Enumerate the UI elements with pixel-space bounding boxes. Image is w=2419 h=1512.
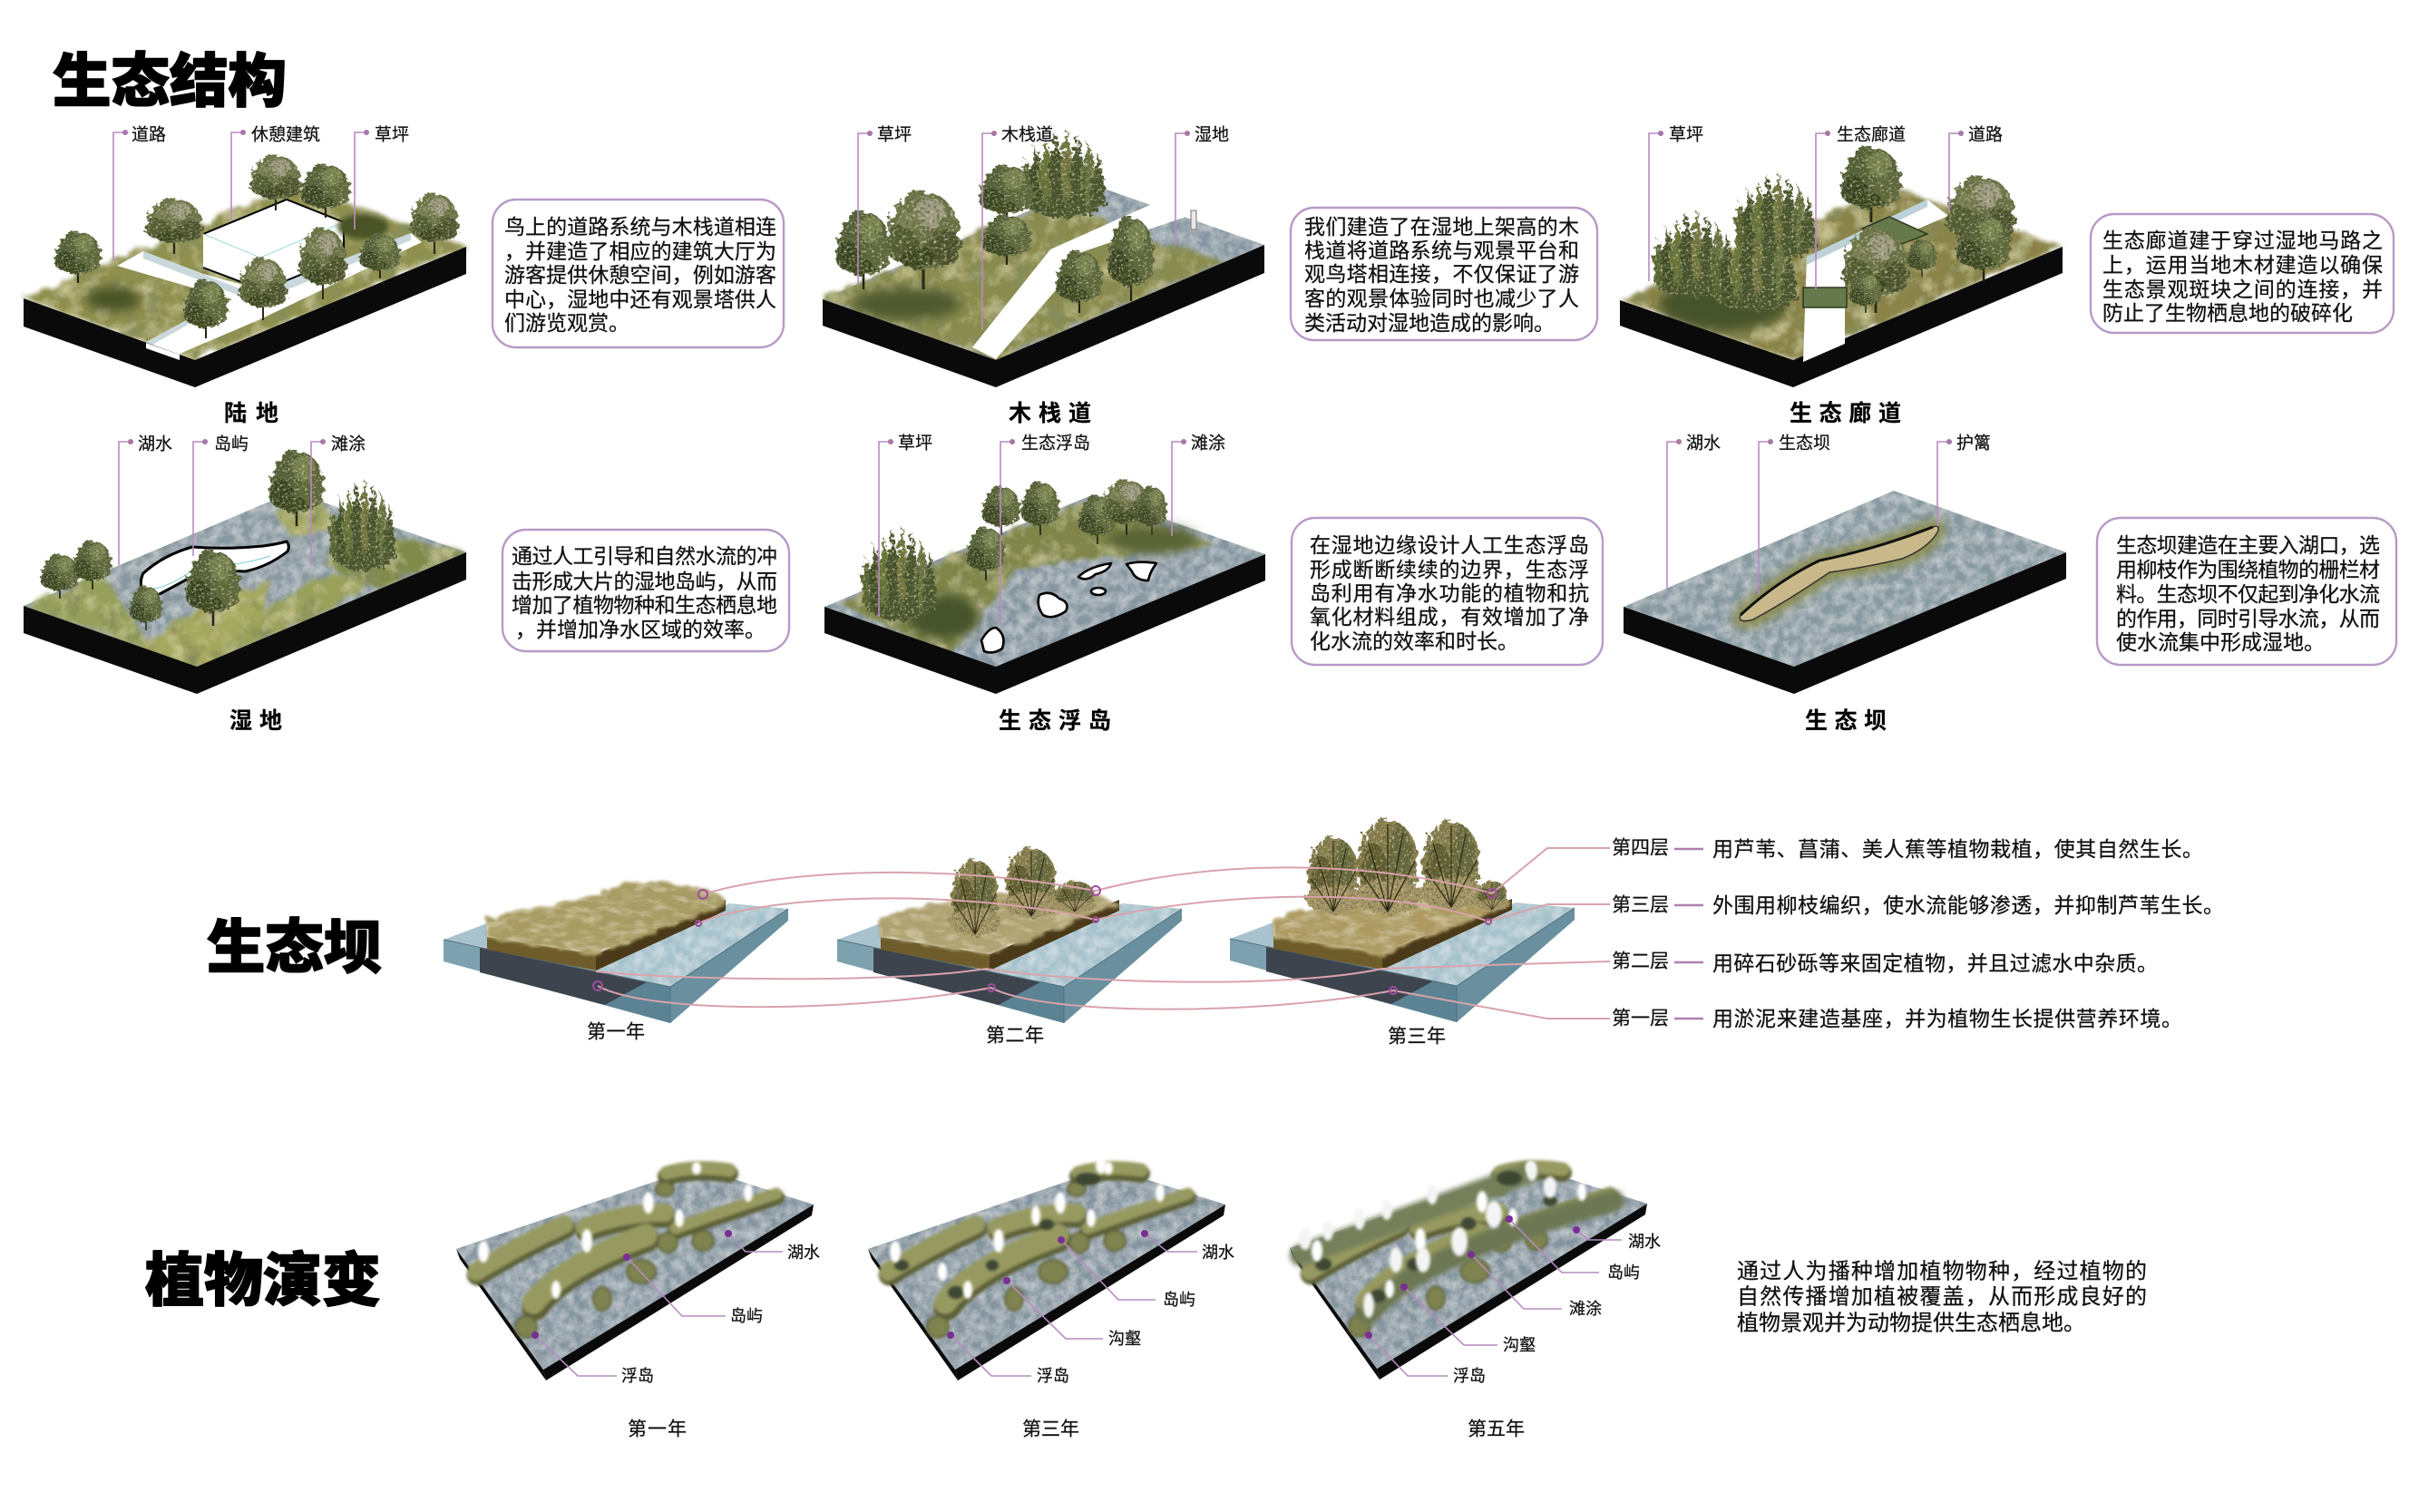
callout: 湿地 [502,530,789,651]
callout: 陆地: 中心，湿地中还有观景塔供人 [504,288,776,311]
labels: 木栈道: 木栈道 [1001,125,1053,145]
labels: 陆地: 道路 [132,125,166,145]
callout: 生态坝: 料。生态坝不仅起到净化水流 [2116,582,2380,606]
labels: plate 第五年 [1365,1215,1661,1385]
labels: 木栈道 [858,125,1229,329]
year label: 第三年: 第三年 [1388,1027,1446,1047]
labels: plate 第一年: 岛屿 [730,1307,763,1325]
heading: 植物演变: 植物演变 [145,1248,381,1313]
dam model: 第二年 [837,848,1182,1023]
labels: plate 第五年: 湖水 [1628,1233,1661,1251]
heading: 生态坝: 生态坝 [207,915,382,980]
callout: 湿地: ，并增加净水区域的效率。 [515,618,766,641]
caption: 生态廊道: 生态廊道 [1790,401,1901,426]
block: 生态浮岛 [824,480,1265,694]
callout: 陆地: 们游览观赏。 [504,311,629,335]
labels: plate 第三年 [947,1230,1234,1385]
layer legend: 用碎石砂砾等来固定植物，并且过滤水中杂质。 [1712,951,2158,975]
plate: 第三年 [868,1157,1225,1380]
labels: 生态廊道: 生态廊道 [1837,125,1906,145]
labels: plate 第一年: 湖水 [787,1244,820,1262]
labels: 湿地: 岛屿 [214,434,249,454]
callout: 木栈道: 栈道将道路系统与观景平台和 [1304,239,1579,262]
caption: 生态坝: 生态坝 [1805,708,1887,734]
callout: 木栈道: 观鸟塔相连接，不仅保证了游 [1304,262,1579,286]
callout: 生态坝: 使水流集中形成湿地。 [2116,630,2325,654]
layer legend: 第一层 [1612,1009,1669,1029]
labels: plate 第一年 [532,1230,820,1385]
labels: plate 第三年: 沟壑 [1108,1330,1141,1348]
callout: 陆地: 鸟上的道路系统与木栈道相连 [504,215,776,239]
labels: plate 第五年: 沟壑 [1503,1336,1536,1354]
labels: plate 第五年: 岛屿 [1607,1263,1640,1282]
connector curves [593,848,1610,1019]
year label: plate 第三年: 第三年 [1022,1419,1079,1440]
labels: 生态坝 [1667,434,1991,595]
labels: plate 第三年: 湖水 [1202,1244,1234,1262]
callout: 木栈道: 客的观景体验同时也减少了人 [1304,287,1579,310]
callout: 生态浮岛: 岛利用有净水功能的植物和抗 [1310,581,1589,605]
dam model: 第三年 [1230,820,1575,1022]
callout: 生态坝 [2097,518,2396,665]
callout: 生态坝: 用柳枝作为围绕植物的栅栏材 [2116,558,2380,581]
block: 生态坝 [1624,491,2066,694]
plate: 第五年 [1290,1161,1647,1380]
caption: 木栈道: 木栈道 [1009,401,1091,426]
callout: 生态坝: 生态坝建造在主要入湖口，选 [2116,533,2380,557]
layer legend: 外围用柳枝编织，使水流能够渗透，并抑制芦苇生长。 [1712,893,2224,917]
labels: 生态浮岛 [879,434,1225,625]
text block: 植物演变说明 [1737,1259,2147,1335]
plate: 第一年 [456,1162,814,1380]
labels: 湿地: 滩涂 [331,434,366,454]
labels: 生态浮岛: 草坪 [898,434,932,454]
labels: 陆地: 休憩建筑 [251,125,320,145]
text block: 植物演变说明: 通过人为播种增加植物物种，经过植物的 [1737,1259,2147,1284]
callout: 生态廊道 [2091,214,2394,333]
labels: 生态廊道 [1649,125,2003,289]
callout: 木栈道: 我们建造了在湿地上架高的木 [1304,215,1579,239]
callout: 生态浮岛: 化水流的效率和时长。 [1310,629,1518,653]
caption: 生态浮岛: 生态浮岛 [999,708,1111,734]
year label: plate 第五年: 第五年 [1468,1419,1525,1440]
labels: 陆地: 草坪 [375,125,409,145]
labels: 生态廊道: 草坪 [1669,125,1703,145]
title: 生态结构: 生态结构 [53,49,287,114]
callout: 湿地: 击形成大片的湿地岛屿，从而 [512,570,777,593]
callout: 湿地: 通过人工引导和自然水流的冲 [512,544,777,568]
year label: 第一年: 第一年 [587,1021,645,1043]
callout: 生态浮岛: 氧化材料组成，有效增加了净 [1310,605,1589,629]
callout: 生态廊道: 生态景观斑块之间的连接，并 [2102,278,2383,301]
callout: 木栈道 [1291,208,1597,340]
callout: 生态浮岛 [1292,518,1603,665]
labels: plate 第五年: 浮岛 [1453,1367,1486,1385]
labels: 生态坝: 生态坝 [1779,434,1830,454]
text block: 植物演变说明: 植物景观并为动物提供生态栖息地。 [1737,1312,2085,1335]
callout: 陆地: 游客提供休憩空间，例如游客 [504,263,776,287]
layer legend [1612,837,2224,1030]
labels: plate 第一年: 浮岛 [621,1367,654,1385]
labels: plate 第三年: 岛屿 [1163,1291,1195,1309]
callout: 生态浮岛: 形成断断续续的边界，生态浮 [1310,558,1589,581]
callout: 生态廊道: 防止了生物栖息地的破碎化 [2102,301,2353,325]
labels: 生态浮岛: 生态浮岛 [1021,434,1090,454]
labels: plate 第五年: 滩涂 [1569,1300,1602,1318]
callout: 陆地: ，并建造了相应的建筑大厅为 [504,239,776,263]
labels: 湿地 [119,434,366,565]
callout: 生态廊道: 生态廊道建于穿过湿地马路之 [2102,229,2383,252]
year label: 第二年: 第二年 [986,1025,1044,1047]
caption: 湿地: 湿地 [229,708,282,734]
year label: plate 第一年: 第一年 [628,1419,687,1440]
labels: 陆地 [113,125,409,260]
labels: 生态廊道: 道路 [1968,125,2003,145]
block: 生态廊道 [1620,148,2063,387]
callout: 生态坝: 的作用，同时引导水流，从而 [2116,607,2380,630]
callout: 湿地: 增加了植物物种和生态栖息地 [512,593,777,617]
layer legend: 第四层 [1612,838,1669,858]
labels: 生态浮岛: 滩涂 [1191,434,1225,454]
labels: 木栈道: 草坪 [877,125,912,145]
labels: 生态坝: 湖水 [1686,434,1721,454]
dam model: 第一年 [444,882,788,1023]
block: 木栈道 [823,129,1264,387]
callout: 生态浮岛: 在湿地边缘设计人工生态浮岛 [1310,533,1589,557]
labels: 湿地: 湖水 [138,434,172,454]
labels: plate 第三年: 浮岛 [1037,1367,1069,1385]
labels: 木栈道: 湿地 [1195,125,1229,145]
block: 陆地 [24,155,466,387]
layer legend: 第二层 [1612,951,1669,972]
callout: 生态廊道: 上，运用当地木材建造以确保 [2102,253,2383,277]
labels: 生态坝: 护篱 [1956,434,1991,454]
layer legend: 用淤泥来建造基座，并为植物生长提供营养环境。 [1712,1007,2182,1030]
caption: 陆地: 陆地 [224,401,278,426]
text block: 植物演变说明: 自然传播增加植被覆盖，从而形成良好的 [1737,1284,2147,1310]
block: 湿地 [24,452,466,694]
layer legend: 用芦苇、菖蒲、美人蕉等植物栽植，使其自然生长。 [1712,837,2203,861]
callout: 木栈道: 类活动对湿地造成的影响。 [1304,311,1555,335]
callout: 陆地 [493,200,784,347]
layer legend: 第三层 [1612,894,1669,916]
